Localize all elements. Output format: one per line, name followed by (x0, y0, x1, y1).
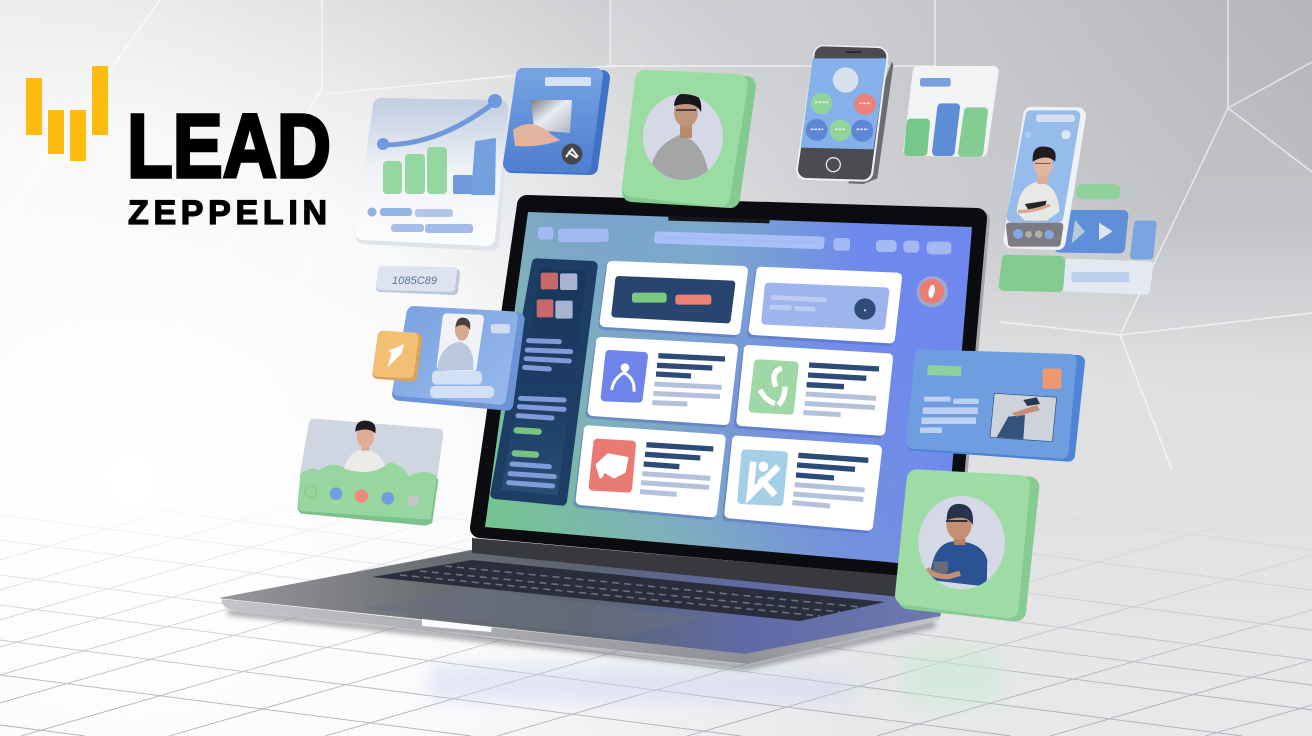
laptop screen (485, 212, 972, 567)
notification button (917, 276, 948, 307)
card: action buttons (603, 266, 743, 333)
person in white shirt (343, 421, 387, 473)
card: figure tile (727, 441, 877, 528)
card: cycle tile (739, 350, 888, 433)
card: status panel (752, 272, 897, 341)
video card (1059, 215, 1123, 248)
phone screen (801, 58, 887, 149)
laptop chin (472, 538, 952, 602)
floating blue profile card with orange badge (377, 312, 518, 404)
person in navy shirt (927, 504, 987, 587)
chart bars (383, 139, 495, 194)
green pill (1076, 184, 1121, 199)
portrait photo (437, 317, 480, 370)
person with book (1017, 147, 1059, 221)
person: grey sweater (652, 94, 708, 180)
green wave panel (299, 464, 437, 524)
wordmark: LEAD: LEAD (127, 97, 331, 197)
chart legend pills (368, 208, 473, 233)
laptop bezel (480, 205, 980, 570)
floating blue article card (913, 356, 1078, 455)
sidebar panel (495, 263, 593, 501)
trend line (377, 94, 502, 150)
green and light bar (1003, 259, 1149, 291)
floating green profile card lower right (905, 479, 1029, 611)
card: profile tile (591, 342, 733, 423)
wordmark: ZEPPELIN: ZEPPELIN (128, 194, 327, 232)
arm photo (990, 393, 1057, 442)
top navigation bar (538, 227, 951, 254)
floating green video call card (299, 421, 438, 524)
phone speaker and home button (826, 51, 861, 172)
laptop (220, 205, 980, 664)
camera notch (668, 216, 770, 223)
floating mobile profile group (1003, 115, 1153, 291)
number pill: 1085C89 (392, 275, 437, 287)
screen dashboard content (495, 216, 951, 528)
floating hand with tablet card (510, 75, 602, 167)
floating green profile card (632, 80, 746, 198)
number pill (380, 270, 456, 291)
laptop base (220, 550, 948, 664)
floating smartphone (801, 51, 893, 184)
icon: orange badge (377, 335, 417, 377)
logo: Lead Zeppelin (26, 66, 331, 232)
floating chart card (363, 94, 502, 243)
card: splash tile (579, 430, 721, 515)
blue side block (1133, 224, 1153, 256)
floating bar chart card (908, 71, 993, 153)
small phone (1009, 115, 1078, 243)
icon: yellow bars (26, 66, 108, 161)
